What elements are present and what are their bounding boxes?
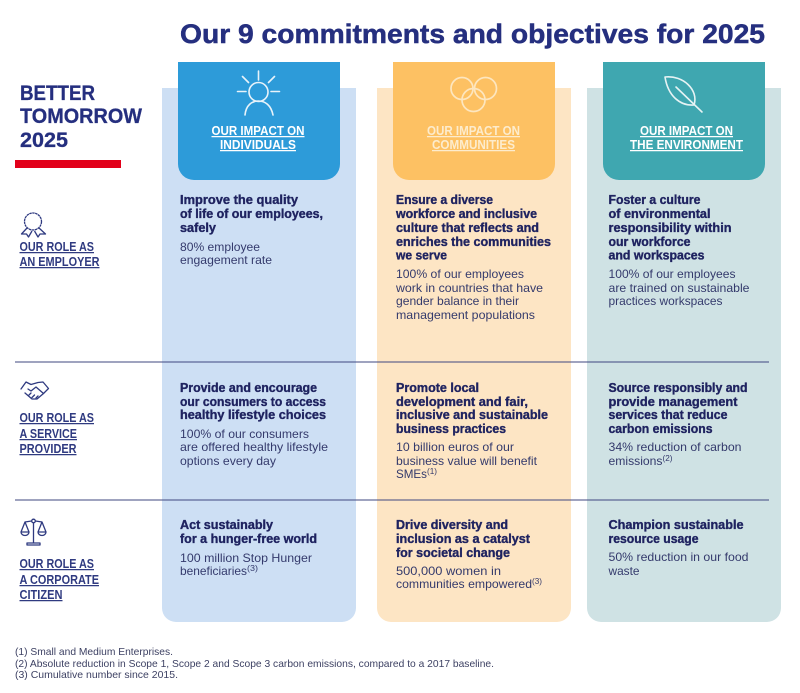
header tab: communities (393, 62, 555, 180)
row: our role as a service provider (20, 382, 94, 456)
text block: individuals / employer: engagement rate (180, 253, 272, 267)
text block: environment / employer: of environmental (608, 207, 710, 221)
text block: communities / employer: 100% of our employees (396, 267, 524, 281)
label: our role as an employer (20, 240, 100, 269)
text block: communities / service provider: (1) (427, 467, 437, 476)
label: our role as a corporate citizen: CITIZEN (20, 588, 62, 602)
label: our role as a corporate citizen: OUR ROLE AS (20, 557, 94, 571)
text block: environment / corporate citizen: waste (608, 564, 640, 578)
text block: communities / service provider (396, 381, 548, 481)
tab heading: communities (427, 124, 520, 152)
text block: environment / corporate citizen: Champion sustainable (608, 518, 744, 532)
label: our role as a corporate citizen: A CORPORATE (20, 573, 99, 587)
text block: individuals / service provider: 100% of our consumers (180, 427, 309, 441)
text block: individuals / corporate citizen: (3) (247, 564, 258, 573)
text block: environment / service provider: (2) (662, 454, 673, 463)
text block: communities / corporate citizen (396, 518, 542, 591)
text block: individuals / service provider: options every day (180, 454, 276, 468)
text block: individuals / service provider (180, 381, 328, 468)
text block: communities / employer: culture that reflects and (396, 221, 539, 235)
row: our role as an employer (20, 213, 100, 269)
text block: communities / service provider: 10 billion euros of our (396, 440, 514, 454)
heading: better tomorrow 2025: TOMORROW (20, 105, 142, 128)
tab heading: individuals (212, 124, 304, 152)
text block: individuals / corporate citizen: 100 million Stop Hunger (180, 551, 312, 565)
heading: better tomorrow 2025 (20, 82, 142, 152)
text block: environment / corporate citizen: resource usage (608, 532, 699, 546)
text block: environment / service provider (608, 381, 748, 468)
text block: communities / corporate citizen: communities empowered (396, 577, 532, 591)
text block: individuals / corporate citizen: beneficiaries (180, 564, 247, 578)
text block: communities / service provider: business value will benefit (396, 454, 538, 468)
label: our role as an employer: OUR ROLE AS (20, 240, 94, 254)
text block: communities / employer: management populations (396, 308, 535, 322)
row: our role as a corporate citizen (20, 519, 99, 602)
label: our role as an employer: AN EMPLOYER (20, 255, 100, 269)
footnotes: (2) Absolute reduction in Scope 1, Scope 2 and Scope 3 carbon emissions, compared to a 2017 baseline. (15, 658, 494, 670)
text block: individuals / corporate citizen: Act sustainably (180, 518, 273, 532)
tab heading: communities: COMMUNITIES (432, 138, 515, 152)
footnotes: (3) Cumulative number since 2015. (15, 669, 178, 681)
text block: communities / service provider: Promote local (396, 381, 479, 395)
header tab: environment (603, 62, 765, 180)
text block: communities / employer: we serve (395, 248, 447, 262)
label: our role as a service provider: PROVIDER (20, 442, 76, 456)
text block: environment / service provider: carbon emissions (608, 422, 713, 436)
heading: better tomorrow 2025: BETTER (20, 82, 95, 105)
text block: environment / employer: are trained on sustainable (608, 281, 750, 295)
panel: communities column (377, 62, 571, 622)
text block: individuals / service provider: our consumers to access (180, 395, 326, 409)
tab heading: individuals: OUR IMPACT ON (212, 124, 304, 138)
text block: environment / service provider: provide management (608, 395, 738, 409)
text block: environment / employer: our workforce (608, 235, 691, 249)
text block: environment / corporate citizen: 50% reduction in our food (608, 550, 748, 564)
icon: leaf (665, 77, 702, 112)
text block: environment / service provider: 34% reduction of carbon (608, 440, 742, 454)
tab heading: individuals: INDIVIDUALS (220, 138, 296, 152)
footnotes: (1) Small and Medium Enterprises. (15, 646, 173, 658)
text block: individuals / employer (180, 193, 323, 267)
text block: communities / employer: gender balance in their (396, 294, 519, 308)
label: our role as a service provider: OUR ROLE AS (20, 411, 94, 425)
text block: individuals / service provider: are offered healthy lifestyle (180, 440, 328, 454)
text block: communities / employer: work in countries that have (395, 281, 543, 295)
text block: communities / employer: enriches the communities (396, 235, 551, 249)
text block: environment / service provider: Source responsibly and (608, 381, 748, 395)
text block: communities / service provider: SMEs (396, 467, 427, 481)
panel: individuals column (162, 62, 356, 622)
text block: communities / service provider: inclusive and sustainable (396, 408, 548, 422)
text block: individuals / employer: Improve the quality (180, 193, 298, 207)
text block: communities / corporate citizen: (3) (532, 577, 542, 586)
panel background: communities (377, 88, 571, 622)
text block: environment / employer: 100% of our employees (608, 267, 736, 281)
text block: individuals / service provider: Provide and encourage (180, 381, 317, 395)
label: our role as a service provider: A SERVICE (20, 427, 77, 441)
text block: environment / employer (608, 193, 750, 308)
heading: better tomorrow 2025: 2025 (20, 129, 68, 152)
text block: environment / employer: responsibility within (608, 221, 732, 235)
text block: communities / corporate citizen: 500,000 women in (396, 564, 501, 578)
text block: individuals / employer: 80% employee (180, 240, 260, 254)
text block: communities / service provider: business practices (396, 422, 506, 436)
label: our role as a service provider (20, 411, 94, 456)
tab heading: environment: OUR IMPACT ON (640, 124, 733, 138)
text block: communities / corporate citizen: for societal change (396, 546, 510, 560)
panel background: individuals (162, 88, 356, 622)
text block: communities / employer: Ensure a diverse (396, 193, 493, 207)
text block: environment / employer: Foster a culture (608, 193, 701, 207)
text block: individuals / corporate citizen (180, 518, 317, 578)
text block: individuals / employer: of life of our employees, (180, 207, 323, 221)
tab heading: environment: THE ENVIRONMENT (630, 138, 743, 152)
text block: communities / corporate citizen: Drive diversity and (396, 518, 508, 532)
label: our role as a corporate citizen (20, 557, 99, 602)
title: Our 9 commitments and objectives for 2025 (180, 19, 765, 49)
text block: environment / employer: practices workspaces (608, 294, 722, 308)
text block: environment / service provider: emissions (608, 454, 662, 468)
text block: environment / corporate citizen (608, 518, 748, 578)
text block: communities / employer: workforce and inclusive (395, 207, 537, 221)
tab heading: environment (630, 124, 743, 152)
panel: environment column (587, 62, 781, 622)
icon: balance scales (21, 519, 46, 545)
red accent bar (15, 160, 121, 168)
text block: individuals / corporate citizen: for a hunger-free world (180, 532, 317, 546)
text block: environment / service provider: services that reduce (608, 408, 728, 422)
text block: communities / service provider: development and fair, (396, 395, 528, 409)
text block: communities / employer (395, 193, 551, 322)
tab heading: communities: OUR IMPACT ON (427, 124, 520, 138)
footnotes (15, 646, 494, 681)
header tab: individuals (178, 62, 340, 180)
icon: award rosette (22, 213, 46, 237)
panel background: environment (587, 88, 781, 622)
icon: handshake (21, 382, 48, 399)
text block: individuals / service provider: healthy lifestyle choices (180, 408, 326, 422)
icon: interlocking rings (451, 78, 496, 112)
text block: individuals / employer: safely (180, 221, 216, 235)
text block: environment / employer: and workspaces (608, 248, 705, 262)
icon: person with sun rays (238, 71, 280, 115)
text block: communities / corporate citizen: inclusion as a catalyst (396, 532, 531, 546)
